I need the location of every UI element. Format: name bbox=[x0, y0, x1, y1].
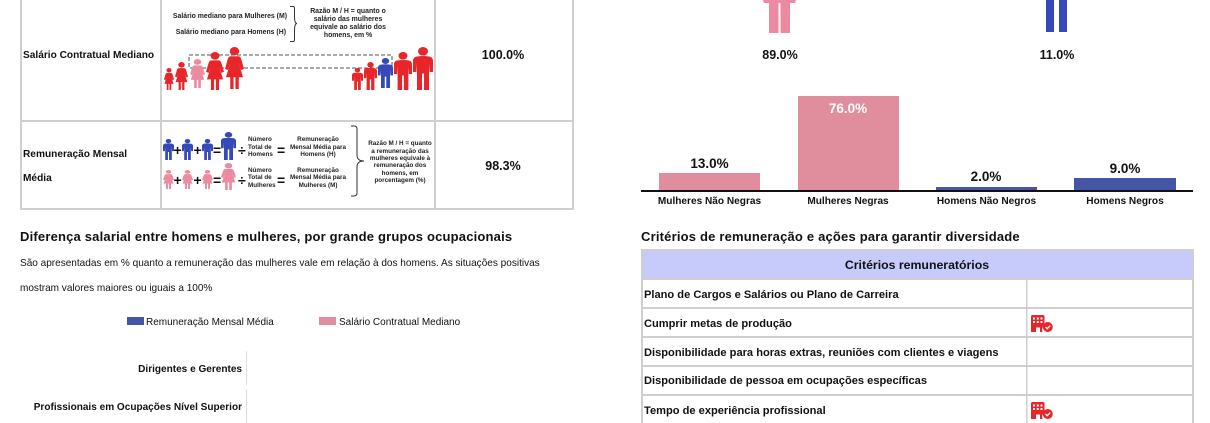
diagram: average pay explanation: Número bbox=[248, 167, 272, 174]
bar chart: race and sex: 2.0% bbox=[971, 169, 1001, 184]
diagram: median salary explanation: Salário mediano para Homens (H) bbox=[176, 29, 286, 36]
diagram: average pay explanation: = bbox=[277, 142, 285, 158]
icon: woman legs bbox=[763, 0, 796, 33]
diagram: median salary explanation: homens, em % bbox=[324, 32, 372, 39]
diagram: median salary explanation: Salário mediano para Mulheres (M) bbox=[173, 13, 287, 20]
value: average pay ratio: 98.3% bbox=[485, 159, 521, 173]
bar chart: race and sex: Homens Negros bbox=[1086, 196, 1164, 207]
diagram: average pay explanation: homens, em bbox=[382, 170, 419, 177]
diagram: average pay explanation: Mensal Média para bbox=[290, 174, 346, 181]
diagram: average pay explanation: Total de bbox=[248, 144, 272, 151]
bar chart: occupation groups: Dirigentes e Gerentes bbox=[138, 364, 242, 375]
bar chart: race and sex: 13.0% bbox=[690, 156, 729, 171]
heading: pay gap by occupation: Diferença salarial entre homens e mulheres, por grande grupos ocupacionais bbox=[20, 229, 512, 244]
diagram: average pay explanation: Total de bbox=[248, 174, 272, 181]
diagram: average pay explanation: Homens bbox=[248, 151, 273, 158]
diagram: average pay explanation: Homens (H) bbox=[300, 151, 336, 158]
table: pay criteria: Plano de Cargos e Salários ou Plano de Carreira bbox=[644, 289, 899, 301]
diagram: average pay explanation: + bbox=[174, 142, 182, 158]
diagram: average pay explanation: + bbox=[194, 142, 202, 158]
diagram: average pay explanation: = bbox=[213, 142, 221, 158]
bar chart: race and sex: 9.0% bbox=[1110, 161, 1140, 176]
bar chart: occupation groups: Profissionais em Ocupações Nível Superior bbox=[34, 402, 242, 413]
diagram: average pay explanation bbox=[163, 126, 432, 196]
text block: pay gap description: São apresentadas em % quanto a remuneração das mulheres vale em relação à dos homens. As situações positivas bbox=[20, 258, 540, 269]
heading: criteria: Critérios de remuneração e ações para garantir diversidade bbox=[641, 229, 1020, 244]
bar chart: race and sex: Mulheres Não Negras bbox=[658, 196, 761, 207]
diagram: average pay explanation: Mulheres (M) bbox=[299, 182, 337, 189]
value: men share: 11.0% bbox=[1040, 48, 1074, 62]
bar chart: occupation groups bbox=[34, 351, 247, 423]
bar chart: race and sex: 76.0% bbox=[829, 101, 867, 116]
table: pay criteria: Cumprir metas de produção bbox=[644, 318, 792, 330]
diagram: average pay explanation: Mensal Média para bbox=[290, 144, 346, 151]
legend: Salário Contratual Mediano bbox=[339, 317, 461, 328]
row label: median contract salary: Salário Contratual Mediano bbox=[23, 50, 154, 61]
diagram: median salary explanation: salário das mulheres bbox=[314, 16, 382, 23]
diagram: average pay explanation: ÷ bbox=[238, 172, 246, 188]
table: pay criteria: Disponibilidade para horas extras, reuniões com clientes e viagens bbox=[644, 347, 999, 359]
bar chart: race and sex: Homens Não Negros bbox=[937, 196, 1037, 207]
diagram: median salary explanation bbox=[164, 6, 433, 90]
table header bbox=[641, 250, 1193, 279]
row label: average monthly pay: Remuneração Mensal bbox=[23, 149, 127, 160]
text block: pay gap description bbox=[20, 258, 540, 294]
table: pay criteria: Disponibilidade de pessoa em ocupações específicas bbox=[644, 375, 927, 387]
icon: company check bbox=[1031, 402, 1053, 419]
diagram: average pay explanation: + bbox=[194, 172, 202, 188]
legend: Remuneração Mensal Média bbox=[146, 317, 274, 328]
diagram: median salary explanation: Razão M / H = quanto o bbox=[310, 8, 386, 15]
value: women share: 89.0% bbox=[762, 48, 798, 62]
panel: pay ratio table bbox=[20, 0, 574, 210]
diagram: average pay explanation: mulheres equivale à bbox=[370, 155, 431, 162]
diagram: average pay explanation: = bbox=[277, 172, 285, 188]
diagram: average pay explanation: Remuneração bbox=[297, 167, 339, 174]
diagram: average pay explanation: + bbox=[174, 172, 182, 188]
text block: pay gap description: mostram valores maiores ou iguais a 100% bbox=[20, 283, 212, 294]
diagram: average pay explanation: = bbox=[213, 172, 221, 188]
bar chart: race and sex: Mulheres Negras bbox=[807, 196, 889, 207]
diagram: average pay explanation: Mulheres bbox=[248, 182, 276, 189]
row label: average monthly pay: Média bbox=[23, 173, 52, 184]
diagram: average pay explanation: Número bbox=[248, 136, 272, 143]
diagram: average pay explanation: Razão M / H = quanto bbox=[368, 140, 432, 147]
diagram: median salary explanation: equivale ao salário dos bbox=[310, 24, 386, 31]
table header: Critérios remuneratórios bbox=[845, 258, 989, 272]
icon: man legs bbox=[1046, 0, 1067, 32]
icon: company check bbox=[1031, 315, 1053, 332]
diagram: average pay explanation: Remuneração bbox=[297, 136, 339, 143]
legend bbox=[127, 317, 461, 328]
row label: average monthly pay bbox=[23, 149, 127, 184]
diagram: average pay explanation: ÷ bbox=[238, 142, 246, 158]
diagram: average pay explanation: remuneração dos bbox=[374, 162, 427, 169]
bar chart: race and sex bbox=[641, 96, 1193, 207]
diagram: average pay explanation: porcentagem (%) bbox=[374, 177, 426, 184]
value: median salary ratio: 100.0% bbox=[482, 48, 524, 62]
table: pay criteria: Tempo de experiência profissional bbox=[644, 405, 826, 417]
table: pay criteria bbox=[641, 249, 1194, 423]
diagram: average pay explanation: a remuneração das bbox=[371, 148, 429, 155]
